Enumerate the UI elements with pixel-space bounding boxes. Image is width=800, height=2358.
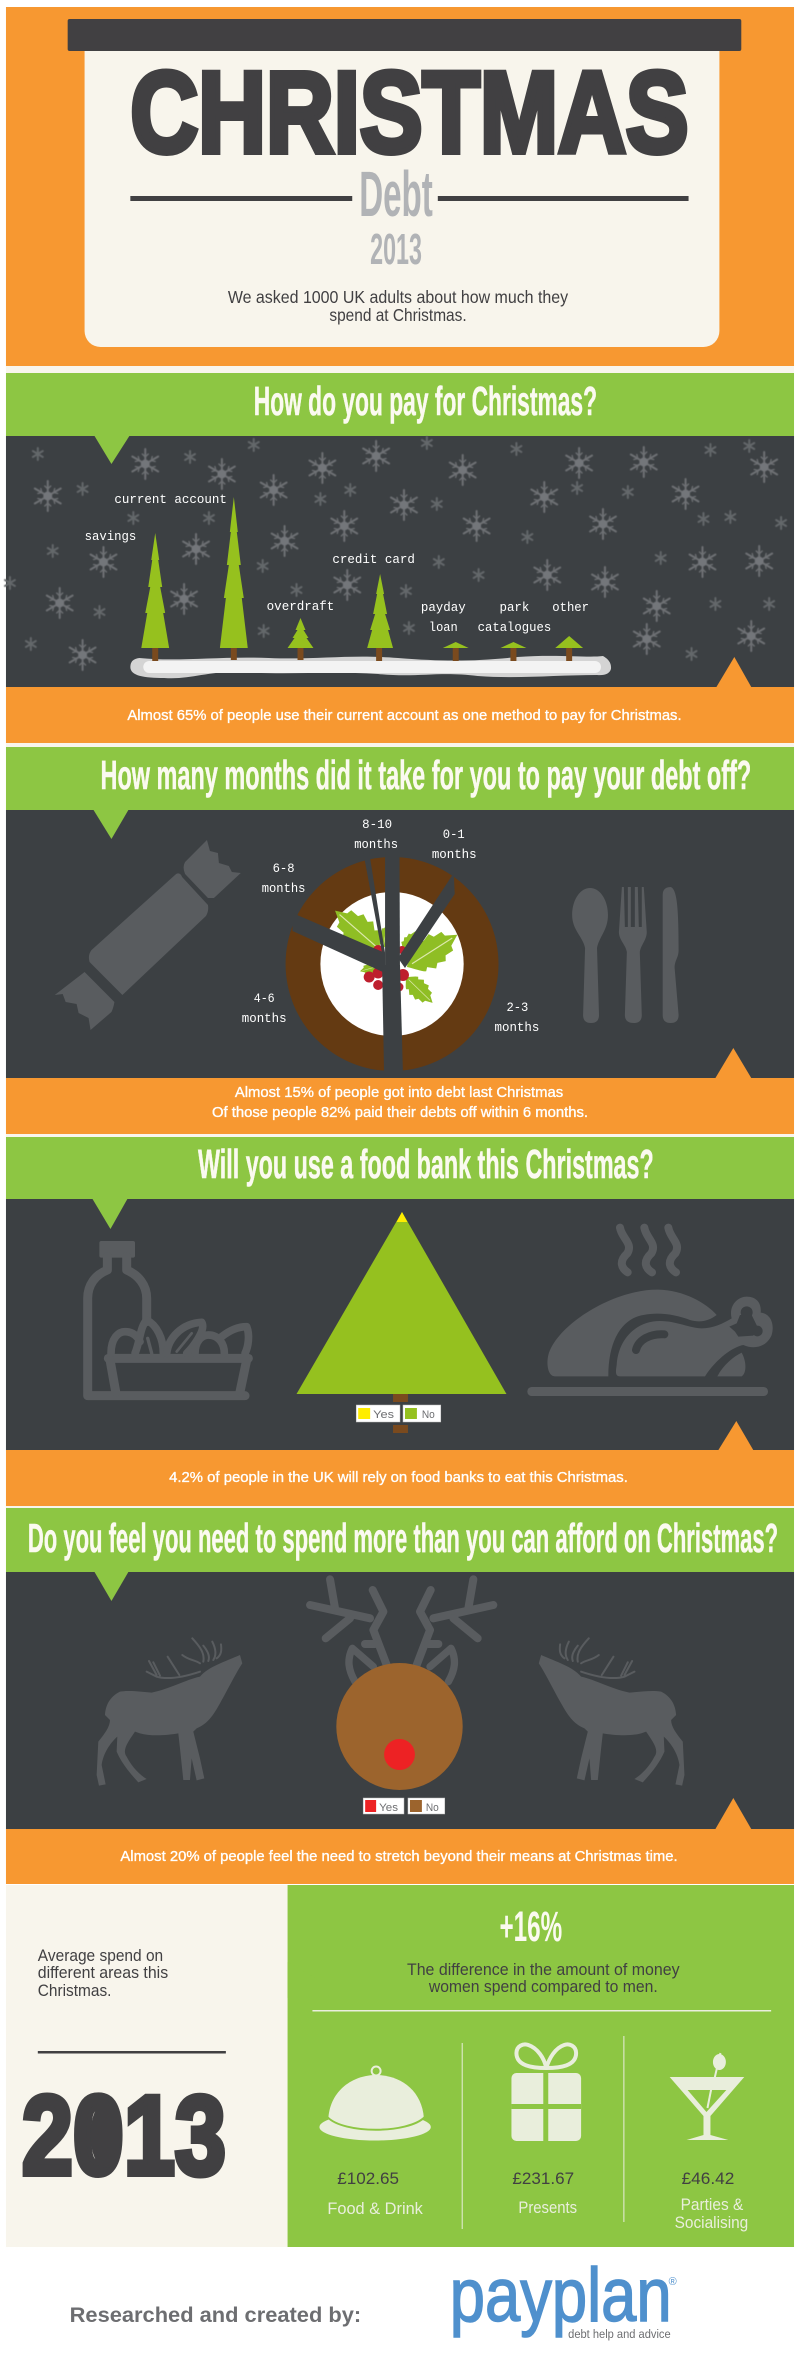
title rule right bbox=[438, 196, 689, 201]
amounts: £46.42 bbox=[682, 2169, 734, 2188]
credit text: Researched and created by: bbox=[70, 2304, 361, 2327]
title rule left bbox=[130, 196, 352, 201]
panel: header bbox=[6, 7, 794, 366]
pointer: green bbox=[93, 1199, 127, 1229]
tree chart bbox=[297, 1212, 506, 1433]
antlers bbox=[310, 1579, 493, 1682]
pie labels: 4-6 bbox=[254, 991, 275, 1006]
stat description: women spend compared to men. bbox=[428, 1977, 658, 1996]
tree: credit card bbox=[367, 574, 393, 648]
icon: stag left bbox=[97, 1638, 242, 1786]
legend: reindeer chart bbox=[363, 1798, 445, 1814]
icon: stag right bbox=[539, 1638, 684, 1786]
icon: bottle and basket bbox=[88, 1241, 249, 1396]
intro text: We asked 1000 UK adults about how much they bbox=[228, 287, 568, 307]
tree: savings bbox=[141, 533, 169, 648]
tree labels: other bbox=[552, 600, 589, 615]
stat description bbox=[407, 1960, 680, 1996]
tree labels: loan bbox=[429, 620, 458, 635]
caption band bbox=[6, 687, 794, 743]
pointer bbox=[288, 1962, 317, 1998]
text: average spend bbox=[38, 1946, 168, 2000]
tree: other bbox=[555, 636, 583, 648]
year 2013: 2013 bbox=[22, 2073, 226, 2198]
tree: current account bbox=[220, 497, 248, 648]
intro text: spend at Christmas. bbox=[329, 305, 467, 325]
snowflakes bbox=[5, 437, 786, 670]
tree labels: savings bbox=[85, 529, 136, 544]
logo: payplan: debt help and advice bbox=[568, 2327, 671, 2341]
subtitle: Debt: Debt bbox=[359, 158, 433, 230]
title card bbox=[85, 30, 719, 347]
pointer: green bbox=[94, 810, 128, 839]
caption band bbox=[6, 1829, 794, 1884]
pie labels: 0-1 bbox=[443, 827, 465, 842]
pointer: green bbox=[95, 436, 129, 464]
text: average spend: Christmas. bbox=[38, 1981, 111, 2000]
divider bbox=[38, 2051, 226, 2054]
icon: holly bbox=[324, 898, 466, 1010]
category labels bbox=[327, 2195, 748, 2232]
caption: Of those people 82% paid their debts off within 6 months. bbox=[212, 1104, 588, 1121]
red nose bbox=[384, 1739, 415, 1770]
intro text bbox=[228, 287, 568, 325]
caption: Almost 65% of people use their current account as one method to pay for Christmas. bbox=[127, 707, 682, 724]
subtitle: year: 2013 bbox=[370, 225, 422, 274]
pie labels: months bbox=[495, 1020, 539, 1035]
pointer: orange bbox=[715, 1048, 751, 1078]
tree labels: overdraft bbox=[267, 599, 334, 614]
text: average spend: different areas this bbox=[38, 1963, 168, 1982]
legend: tree chart bbox=[356, 1405, 441, 1422]
heading band bbox=[6, 747, 794, 810]
legend: reindeer chart: No bbox=[426, 1802, 439, 1814]
pie labels: 6-8 bbox=[273, 861, 295, 876]
icon: martini bbox=[670, 2053, 744, 2140]
slice gaps bbox=[293, 852, 455, 1075]
tree labels: payday bbox=[421, 600, 466, 615]
pointer: orange bbox=[718, 1421, 753, 1450]
logo: payplan: payplan bbox=[450, 2253, 672, 2338]
tree labels bbox=[85, 492, 589, 635]
pie labels bbox=[242, 817, 539, 1035]
tree labels: catalogues bbox=[478, 620, 551, 635]
caption bbox=[212, 1084, 588, 1121]
category labels: Socialising bbox=[675, 2213, 748, 2232]
tree: park catalogues bbox=[500, 642, 526, 648]
pointer: orange bbox=[715, 1798, 751, 1829]
panel: food bank bbox=[6, 1137, 794, 1506]
dark chart background bbox=[6, 810, 794, 1078]
tree labels: park bbox=[500, 600, 530, 615]
caption: Almost 15% of people got into debt last Christmas bbox=[235, 1084, 563, 1101]
dark chart background bbox=[6, 1199, 794, 1450]
reindeer chart bbox=[310, 1579, 493, 1790]
pointer: orange bbox=[716, 657, 751, 687]
icon: cloche bbox=[319, 2066, 431, 2140]
panel: average spend left bbox=[6, 1885, 288, 2247]
title: Christmas: CHRISTMAS bbox=[130, 49, 689, 177]
icon: present bbox=[511, 2044, 581, 2141]
panel: how do you pay bbox=[5, 373, 794, 743]
pie labels: 2-3 bbox=[506, 1000, 528, 1015]
logo: payplan: ® bbox=[669, 2276, 677, 2288]
caption: 4.2% of people in the UK will rely on food banks to eat this Christmas. bbox=[169, 1469, 628, 1486]
panel: spend more than you can afford bbox=[6, 1508, 794, 1884]
caption band bbox=[6, 1450, 794, 1506]
dark chart background bbox=[6, 1572, 794, 1829]
reindeer face bbox=[336, 1663, 463, 1790]
category labels: Food & Drink bbox=[327, 2199, 423, 2218]
header bar bbox=[68, 19, 741, 51]
heading band bbox=[6, 1508, 794, 1572]
snow ground bbox=[130, 656, 611, 678]
category labels: Parties & bbox=[681, 2195, 744, 2214]
pie chart pudding bbox=[286, 852, 499, 1075]
tree: overdraft bbox=[288, 618, 313, 648]
trunks bbox=[152, 648, 572, 661]
pie labels: 8-10 bbox=[362, 817, 392, 832]
pie labels: months bbox=[262, 881, 305, 896]
legend: reindeer chart: Yes bbox=[379, 1802, 399, 1814]
stat description: The difference in the amount of money bbox=[407, 1960, 680, 1979]
icon: roast turkey bbox=[527, 1228, 773, 1396]
heading band bbox=[6, 1137, 794, 1199]
pie labels: months bbox=[354, 837, 398, 852]
heading band bbox=[6, 373, 794, 436]
icon: cutlery bbox=[572, 887, 679, 1023]
caption band bbox=[6, 1078, 794, 1134]
amounts bbox=[337, 2169, 734, 2188]
amounts: £102.65 bbox=[337, 2169, 399, 2188]
pie labels: months bbox=[242, 1011, 287, 1026]
stat: +16%: +16% bbox=[500, 1903, 562, 1951]
legend: tree chart: Yes bbox=[373, 1409, 395, 1421]
tree labels: current account bbox=[114, 492, 227, 507]
tree labels: credit card bbox=[332, 552, 415, 567]
legend: tree chart: No bbox=[422, 1409, 435, 1421]
panel: months to pay off debt bbox=[6, 747, 794, 1134]
icon: cracker bbox=[55, 840, 241, 1030]
text: average spend: Average spend on bbox=[38, 1946, 163, 1965]
tree: payday loan bbox=[443, 642, 469, 648]
pie labels: months bbox=[432, 847, 477, 862]
panel: women vs men right bbox=[288, 1885, 794, 2247]
amounts: £231.67 bbox=[512, 2169, 574, 2188]
pointer: green bbox=[95, 1572, 128, 1601]
caption: Almost 20% of people feel the need to stretch beyond their means at Christmas time. bbox=[120, 1848, 678, 1865]
dark chart background bbox=[6, 436, 794, 687]
category labels: Presents bbox=[518, 2198, 577, 2217]
